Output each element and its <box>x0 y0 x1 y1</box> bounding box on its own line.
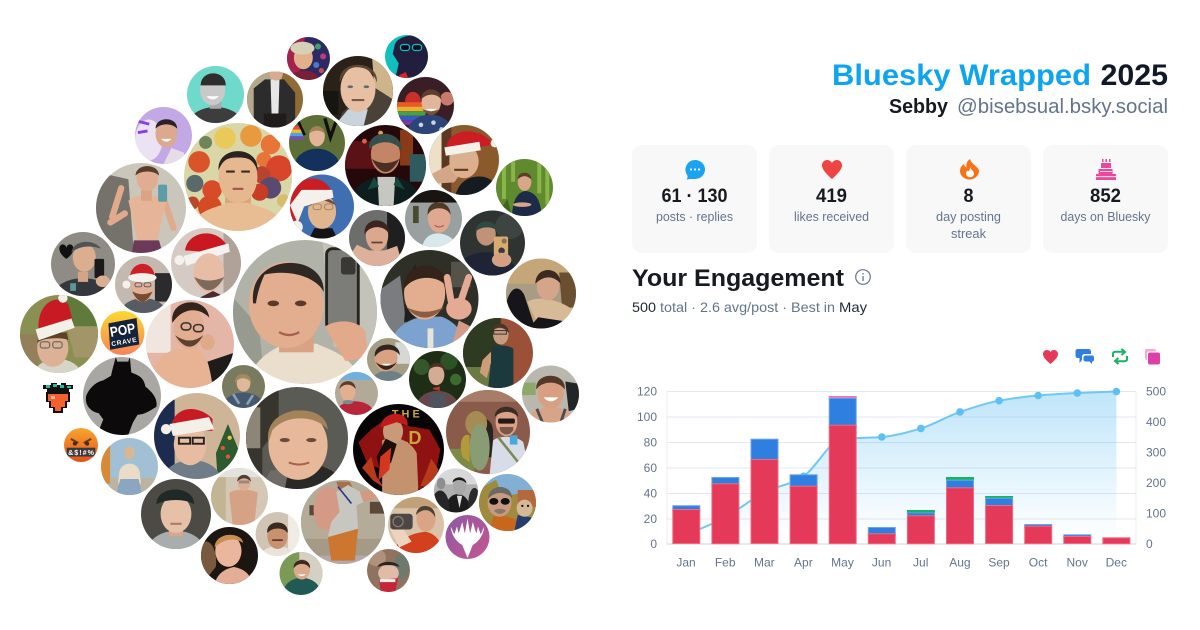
panel: day posting streak: day posting <box>936 209 1001 224</box>
avatar: shadow silhouette <box>83 357 161 435</box>
panel: days on Bluesky: days on Bluesky <box>1060 209 1151 224</box>
avatar: green plaid bow tie <box>409 351 466 408</box>
avatar: teal portrait <box>187 66 244 123</box>
stacked bars <box>673 396 1130 544</box>
avatar: black background in red: T H E <box>392 409 420 421</box>
avatar: shirtless with glasses <box>146 300 234 388</box>
month labels: Mar <box>754 556 775 570</box>
avatar: santa hat outdoors <box>20 295 98 373</box>
heading: Your Engagement: Your Engagement <box>632 265 844 292</box>
avatar: man with moustache in car <box>323 56 393 126</box>
panel: days on Bluesky <box>1043 145 1168 253</box>
avatar: Pop Crave logo: POP <box>109 320 136 340</box>
right axis labels: 500 <box>1146 384 1166 398</box>
icon: reposts arrows <box>1113 349 1127 364</box>
avatar: topiary <box>446 390 530 474</box>
left axis labels <box>637 384 657 551</box>
avatar: blond shirtless <box>201 527 258 584</box>
engagement summary: 500 <box>632 299 656 315</box>
chart legend icons <box>1043 349 1160 364</box>
avatar cluster <box>20 35 579 609</box>
month labels: May <box>831 556 854 570</box>
avatar: black background in red: LD <box>397 428 422 448</box>
icon: chat bubble <box>685 160 705 180</box>
avatar: white tee <box>405 190 462 247</box>
avatar: orange hoodie with phone <box>388 497 444 553</box>
avatar: santa hat and beard <box>115 256 172 313</box>
avatar: green shirt <box>280 552 322 595</box>
avatar: man with floral background <box>184 123 292 231</box>
chart: engagement by month <box>637 384 1166 570</box>
icon: pixel carrot emoji <box>43 383 73 413</box>
left axis labels: 20 <box>644 512 657 526</box>
month labels <box>676 556 1127 570</box>
avatar: Pop Crave logo <box>100 311 144 355</box>
avatar: smiling beard <box>367 338 410 381</box>
avatar: blue sky santa <box>290 174 354 238</box>
icon: flame <box>960 159 979 180</box>
avatar: red hoodie <box>335 372 378 415</box>
panel: posts and replies <box>632 145 757 253</box>
avatar: large selfie with phone <box>233 240 377 384</box>
avatar: big santa hat, grey beard <box>171 228 241 298</box>
left axis labels: 0 <box>650 537 657 551</box>
left axis labels: 120 <box>637 384 657 398</box>
avatar: flexing arm <box>301 480 385 564</box>
avatar: smile in car <box>522 366 579 422</box>
avatar: santa hat with christmas tree <box>154 393 240 479</box>
right axis labels: 400 <box>1146 415 1166 429</box>
left axis labels: 100 <box>637 410 657 424</box>
icon: likes heart <box>1043 350 1058 364</box>
avatar: blue jacket <box>222 365 265 408</box>
avatar: Darth Vader cartoon <box>385 35 428 78</box>
panel: posts and replies: 61 · 130 <box>662 186 728 207</box>
grid lines and axes <box>667 391 1136 544</box>
left axis labels: 40 <box>644 486 657 500</box>
avatar: rainbow mural floral shirt <box>397 77 454 151</box>
avatar: green jacket, red bar lights <box>345 125 426 206</box>
avatar: santa hat thinking <box>429 125 499 195</box>
user name and handle: @bisebsual.bsky.social <box>957 96 1168 118</box>
avatar: sunglasses and dog <box>479 474 536 531</box>
panel: days on Bluesky: 852 <box>1090 186 1121 207</box>
avatar: peace sign blue shirt <box>380 250 478 348</box>
avatar: navy t-shirt rainbow wall <box>289 115 345 189</box>
left axis labels: 60 <box>644 461 657 475</box>
avatar: moustache portrait <box>256 512 300 556</box>
left axis labels: 80 <box>644 436 657 450</box>
panel: likes received: 419 <box>816 186 847 207</box>
avatar: shirtless small mirror <box>211 468 268 525</box>
avatar: blond selfie <box>246 387 348 489</box>
avatar: green trees <box>496 159 553 216</box>
avatar: dark suit <box>247 67 303 128</box>
avatar: brick wall black vest <box>463 318 533 388</box>
avatar: purple room <box>135 107 192 164</box>
icon: info <box>856 270 870 284</box>
avatar: Magic logo <box>446 515 490 559</box>
month labels: Nov <box>1067 556 1088 570</box>
icon: heart <box>822 160 842 179</box>
icon: angry cursing emoji: &$!#% <box>68 449 95 457</box>
panel: day posting streak: 8 <box>964 186 974 207</box>
right axis labels: 200 <box>1146 476 1166 490</box>
avatar: black and white group <box>434 468 478 512</box>
engagement summary: total · 2.6 avg/post · Best in <box>660 299 835 315</box>
panel: day posting streak <box>906 145 1031 253</box>
avatar: peace sign mirror selfie <box>96 163 186 253</box>
right axis labels <box>1146 384 1166 551</box>
icon: angry cursing emoji <box>64 428 98 462</box>
icon: replies bubbles <box>1076 349 1094 364</box>
title: 2025 <box>1100 59 1168 92</box>
avatar: festive lights <box>287 37 330 80</box>
icon: quotes squares <box>1145 349 1160 364</box>
month labels: Jul <box>913 556 928 570</box>
title: Bluesky Wrapped <box>832 59 1091 92</box>
icon: birthday cake <box>1096 159 1116 180</box>
right axis labels: 300 <box>1146 446 1166 460</box>
month labels: Jun <box>872 556 891 570</box>
avatar: black background in red <box>353 404 444 495</box>
panel: posts and replies: posts · replies <box>656 209 733 224</box>
avatar: mirror selfie blue sky <box>101 438 158 495</box>
user name and handle: Sebby <box>889 96 949 118</box>
month labels: Jan <box>676 556 696 570</box>
avatar: upside down santa <box>367 549 410 592</box>
month labels: Dec <box>1106 556 1127 570</box>
right axis labels: 100 <box>1146 506 1166 520</box>
month labels: Sep <box>988 556 1010 570</box>
avatar: dark green cap <box>141 479 211 549</box>
panel: likes received: likes received <box>794 209 869 224</box>
avatar: gold phone selfie <box>456 210 525 294</box>
month labels: Oct <box>1029 556 1048 570</box>
avatar: shirtless moustache <box>349 210 405 266</box>
engagement summary: May <box>839 299 867 315</box>
panel: day posting streak: streak <box>951 226 986 241</box>
month labels: Aug <box>949 556 971 570</box>
month labels: Feb <box>715 556 736 570</box>
right axis labels: 0 <box>1146 537 1153 551</box>
cumulative area and line <box>686 388 1120 544</box>
month labels: Apr <box>794 556 813 570</box>
avatar: grey cap selfie <box>51 232 115 296</box>
avatar: Pop Crave logo: CRAVE <box>111 337 138 348</box>
avatar: couch, beige shirt <box>506 258 576 328</box>
panel: likes received <box>769 145 894 253</box>
